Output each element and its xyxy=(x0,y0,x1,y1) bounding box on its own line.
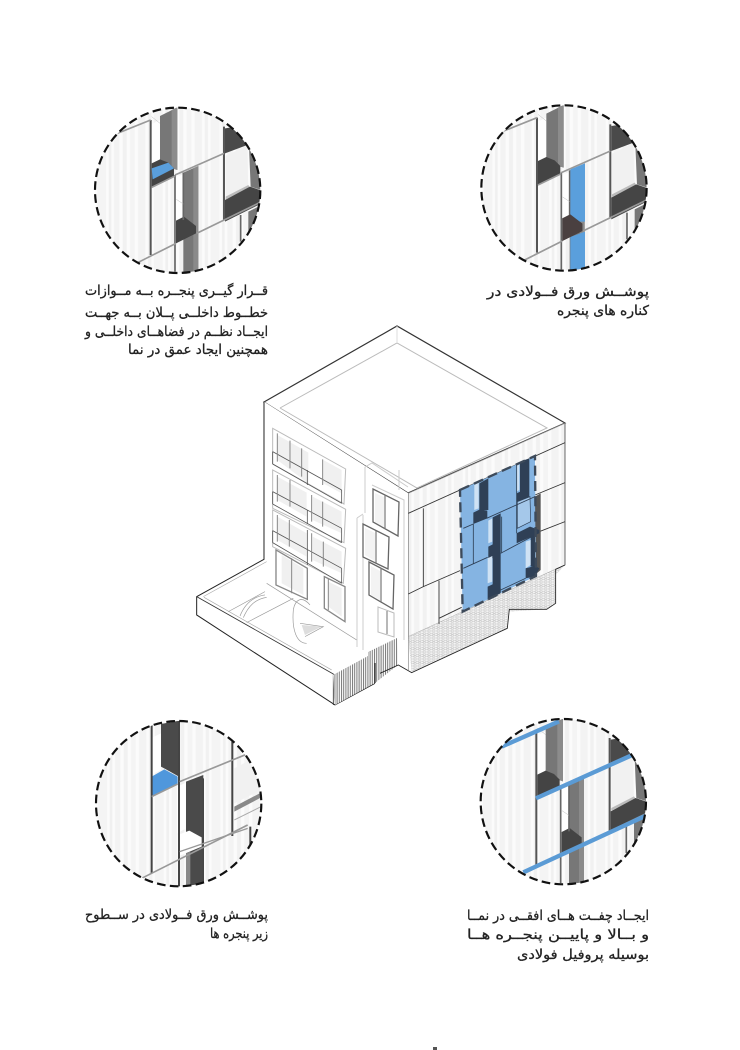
grille xyxy=(333,638,398,705)
text: top-left caption: قــرار گیــری پنجــره بــه مــوازات xyxy=(85,282,268,299)
text: top-right caption: پوشــش ورق فــولادی در xyxy=(486,284,649,300)
pier outlines xyxy=(357,463,408,650)
text: top-right caption xyxy=(486,284,650,319)
text: bottom-right caption: ایجــاد چفــت هــای افقــی در نمــا xyxy=(467,908,649,924)
text: bottom-left caption: پوشــش ورق فــولادی در ســطوح xyxy=(85,907,268,923)
window 3 xyxy=(369,562,394,609)
text: bottom-right caption xyxy=(467,908,649,963)
text: bottom-left caption: زیر پنجره ها xyxy=(210,926,268,942)
text: top-left caption: همچنین ایجاد عمق در نما xyxy=(128,342,268,358)
left facade and courtyard xyxy=(197,402,408,705)
window 1 xyxy=(373,489,399,536)
detail circle: horizontal steel profile joints xyxy=(480,718,648,886)
center bay xyxy=(333,463,408,705)
courtyard details xyxy=(228,583,357,643)
icon: blue steel side panel xyxy=(570,163,585,271)
icon: blue window sill xyxy=(152,163,174,179)
text: top-left caption xyxy=(84,282,268,358)
text: bottom-right caption: و بــالا و پاییــن پنجــره هــا xyxy=(467,927,649,943)
window 2 xyxy=(363,524,389,569)
icon: blue horizontal profiles xyxy=(502,721,647,872)
roof xyxy=(264,326,565,493)
right facade xyxy=(380,423,565,673)
detail circle: window parallel to plan lines xyxy=(94,106,262,274)
detail circle: steel sheet on window sides xyxy=(480,104,648,272)
detail circle: steel sheet under windows xyxy=(94,720,262,888)
text: top-left caption: خطــوط داخلــی پــلان بــه جهــت xyxy=(85,305,268,321)
window 4 xyxy=(378,607,394,637)
text: top-left caption: ایجــاد نظــم در فضاهــای داخلــی و xyxy=(84,324,268,340)
text: bottom-right caption: بوسیله پروفیل فولادی xyxy=(517,947,649,963)
stone base xyxy=(408,565,565,673)
icon: blue under-window panel xyxy=(152,769,178,796)
page mark xyxy=(433,1047,437,1050)
text: top-right caption: کناره های پنجره xyxy=(557,303,650,319)
blue highlighted facade area xyxy=(460,456,536,612)
panel seams xyxy=(408,443,565,624)
text: bottom-left caption xyxy=(85,907,268,942)
window bands xyxy=(273,428,346,583)
central isometric building xyxy=(197,326,565,705)
